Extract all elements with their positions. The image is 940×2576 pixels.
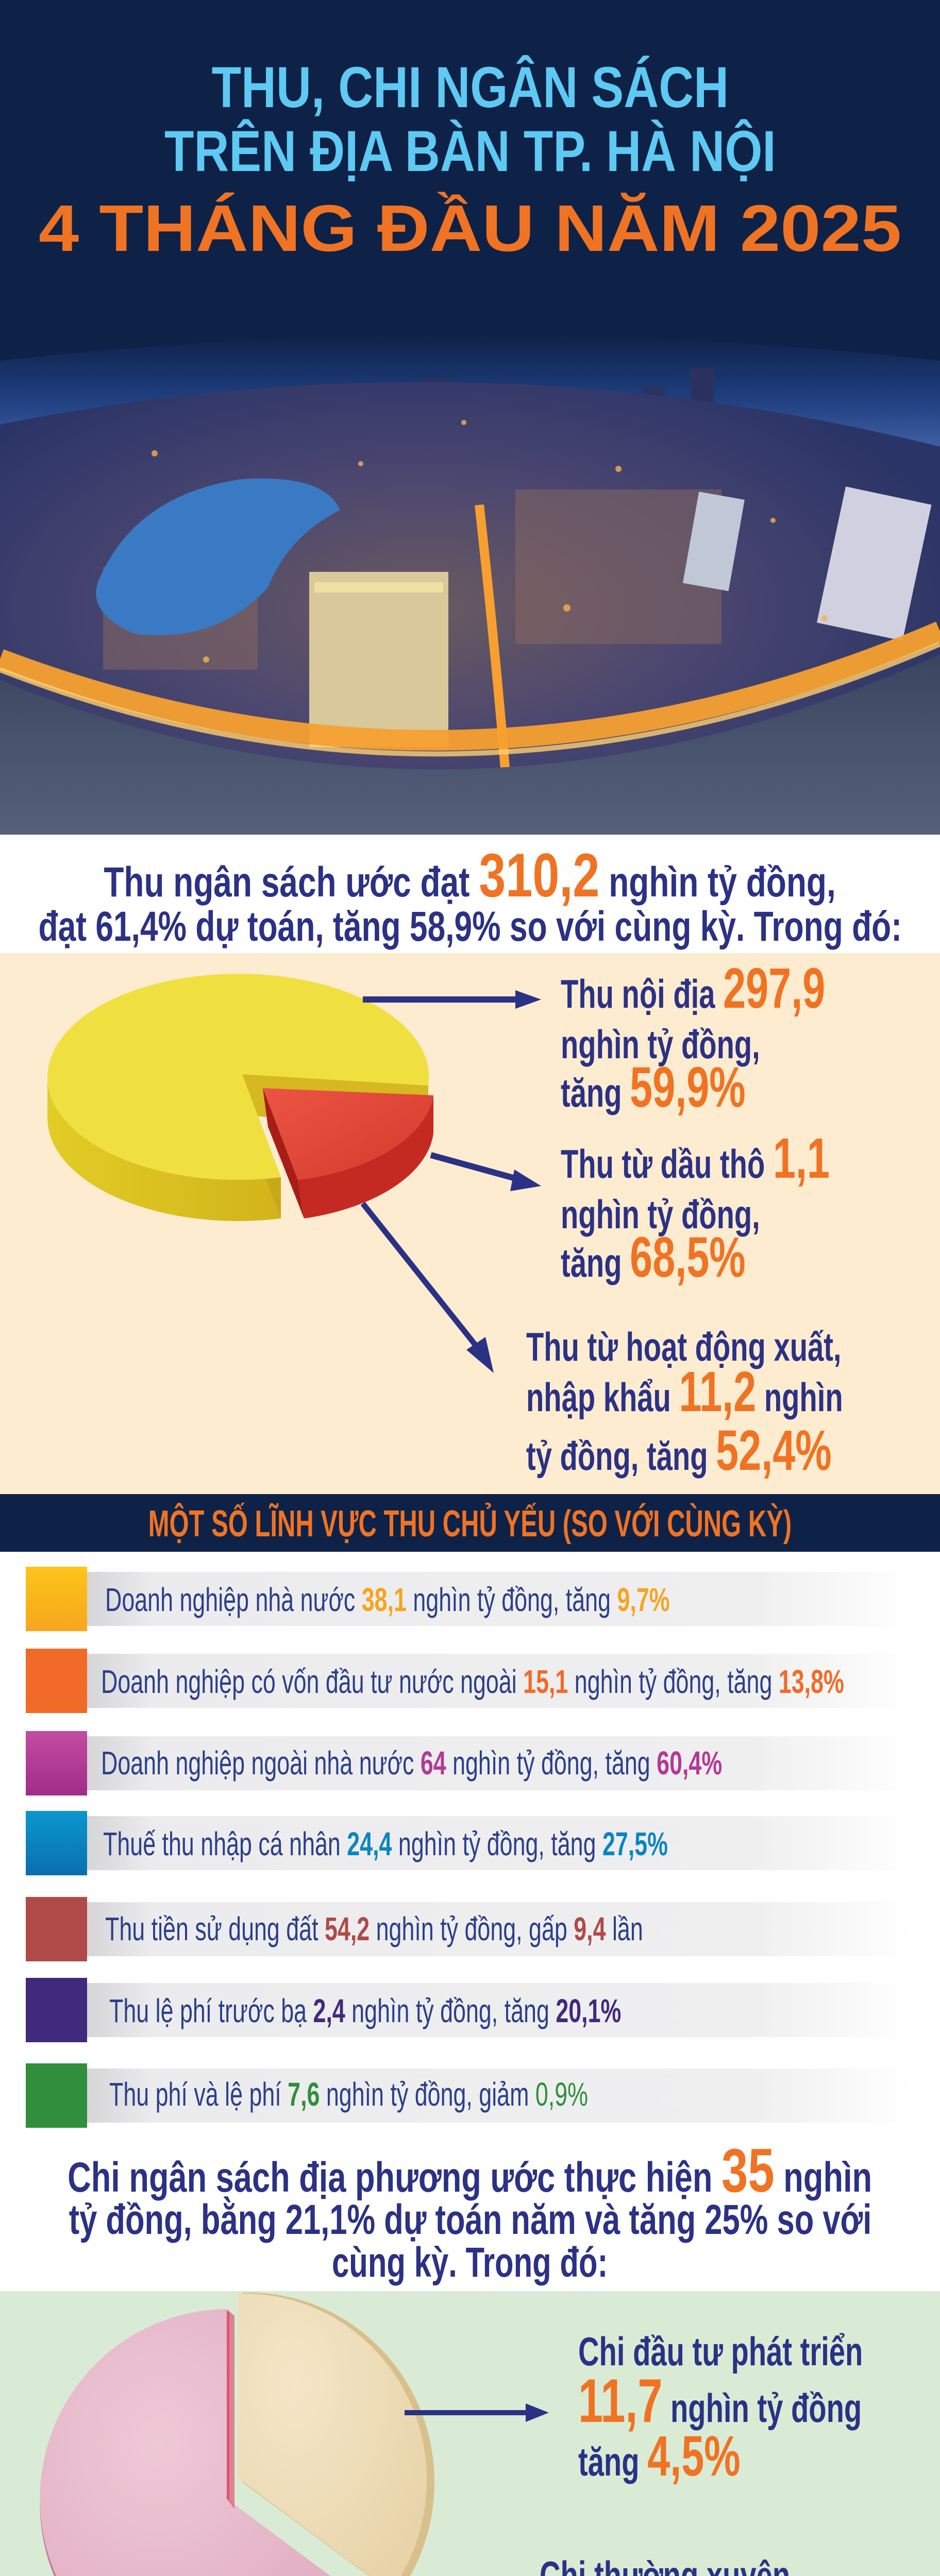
summary expenditure text: cùng kỳ. Trong đó: — [332, 2239, 608, 2286]
photo: Hanoi night fisheye — [0, 344, 940, 835]
lake — [96, 479, 340, 635]
text: domestic revenue: tăng 59,9% — [561, 1056, 746, 1119]
skyline — [216, 368, 714, 448]
text: import export — [526, 1324, 843, 1482]
buildings — [309, 572, 448, 747]
title: 4 THÁNG ĐẦU NĂM 2025 — [39, 192, 901, 265]
red slice side — [298, 1095, 433, 1218]
text: crude oil: tăng 68,5% — [561, 1226, 746, 1289]
title — [39, 55, 901, 265]
text: crude oil: Thu từ dầu thô 1,1 — [561, 1127, 830, 1190]
text: import export: nhập khẩu 11,2 nghìn — [526, 1360, 843, 1423]
orange road arcs — [479, 505, 505, 768]
pink slice — [40, 2312, 384, 2576]
yellow top — [47, 974, 429, 1180]
row: private enterprises — [26, 1731, 831, 1795]
text: crude oil — [561, 1127, 830, 1289]
text: domestic revenue: Thu nội địa 297,9 — [561, 957, 825, 1020]
pie chart: expenditure — [40, 2293, 435, 2576]
pie chart: revenue — [47, 974, 433, 1221]
beige slice — [242, 2293, 434, 2576]
row: land use: Thu tiền sử dụng đất 54,2 nghìn tỷ đồng, gấp 9,4 lần — [105, 1910, 643, 1947]
summary expenditure text — [68, 2136, 872, 2286]
row: FDI enterprises: Doanh nghiệp có vốn đầu tư nước ngoài 15,1 nghìn tỷ đồng, tăng 13,8% — [101, 1663, 844, 1700]
rooftop foreground — [0, 654, 940, 835]
summary revenue text: đạt 61,4% dự toán, tăng 58,9% so với cùng kỳ. Trong đó: — [38, 903, 902, 950]
row: FDI enterprises — [26, 1649, 844, 1713]
panel: revenue breakdown — [0, 953, 940, 1494]
arrow: to development spending — [405, 2403, 549, 2422]
summary revenue text — [38, 841, 902, 950]
red top — [263, 1088, 433, 1180]
summary expenditure text: tỷ đồng, bằng 21,1% dự toán năm và tăng 25% so với — [69, 2196, 871, 2243]
summary expenditure text: Chi ngân sách địa phương ước thực hiện 35 nghìn — [68, 2136, 872, 2205]
row: personal income tax: Thuế thu nhập cá nhân 24,4 nghìn tỷ đồng, tăng 27,5% — [103, 1825, 668, 1862]
row: personal income tax — [26, 1811, 831, 1875]
row: state enterprises — [26, 1567, 831, 1631]
panel: expenditure breakdown — [0, 2291, 940, 2576]
row: state enterprises: Doanh nghiệp nhà nước 38,1 nghìn tỷ đồng, tăng 9,7% — [105, 1581, 670, 1618]
section header: main revenue areas: MỘT SỐ LĨNH VỰC THU CHỦ YẾU (SO VỚI CÙNG KỲ) — [148, 1503, 792, 1545]
row: registration fee — [26, 1978, 831, 2042]
text: import export: Thu từ hoạt động xuất, — [526, 1324, 842, 1369]
text: development spending: 11,7 nghìn tỷ đồng — [578, 2366, 862, 2435]
header background — [0, 0, 940, 835]
arrow: to crude oil — [430, 1152, 541, 1191]
text: domestic revenue: nghìn tỷ đồng, — [561, 1022, 760, 1067]
summary revenue text: Thu ngân sách ước đạt 310,2 nghìn tỷ đồng, — [104, 841, 836, 910]
row: registration fee: Thu lệ phí trước bạ 2,4 nghìn tỷ đồng, tăng 20,1% — [109, 1992, 621, 2029]
text: crude oil: nghìn tỷ đồng, — [561, 1192, 760, 1237]
row: fees and charges: Thu phí và lệ phí 7,6 nghìn tỷ đồng, giảm 0,9% — [109, 2076, 588, 2113]
arrow: to import export — [361, 1201, 494, 1373]
section header: main revenue areas — [0, 1494, 940, 1552]
title: THU, CHI NGÂN SÁCH — [211, 55, 729, 120]
text: development spending — [578, 2329, 863, 2488]
row: land use — [26, 1897, 831, 1961]
row: private enterprises: Doanh nghiệp ngoài nhà nước 64 nghìn tỷ đồng, tăng 60,4% — [101, 1744, 722, 1782]
text: import export: tỷ đồng, tăng 52,4% — [526, 1419, 832, 1482]
text: development spending: Chi đầu tư phát triển — [578, 2329, 863, 2374]
text: domestic revenue — [561, 957, 825, 1119]
arrow: to domestic revenue — [363, 990, 541, 1009]
yellow side — [47, 1077, 281, 1221]
row: fees and charges — [26, 2063, 831, 2128]
title: TRÊN ĐỊA BÀN TP. HÀ NỘI — [164, 119, 776, 183]
text: development spending: tăng 4,5% — [578, 2425, 741, 2488]
